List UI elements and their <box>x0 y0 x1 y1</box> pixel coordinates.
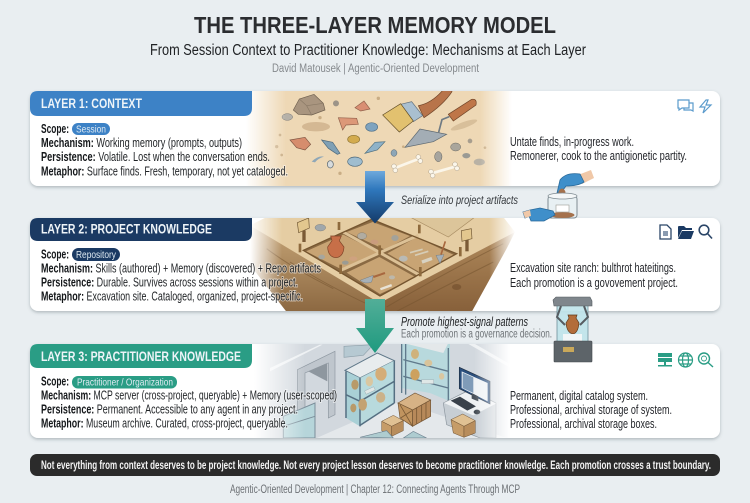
layer 2 details <box>41 248 321 304</box>
icon: document <box>660 225 671 239</box>
layer 3 details: Mechanism: MCP server (cross-project, queryable) + Memory (user-scoped) <box>41 388 337 402</box>
layer 3 details: Persistence: Permanent. Accessible to any agent in any project. <box>41 402 298 416</box>
layer 3 details: Scope: <box>41 374 69 388</box>
layer 1 details <box>41 122 288 178</box>
trowel <box>448 99 476 121</box>
layer 3 note <box>510 389 672 431</box>
author line: David Matousek | Agentic-Oriented Development <box>272 63 480 75</box>
layer 3 header: LAYER 3: PRACTITIONER KNOWLEDGE <box>41 349 241 364</box>
layer 1 details: Scope: <box>41 122 69 136</box>
layer 1 note: Untate finds, in-progress work. <box>510 135 634 149</box>
layer 1 header: LAYER 1: CONTEXT <box>41 96 143 111</box>
layer 2 note: Excavation site ranch: bulthrot hateitings. <box>510 261 676 275</box>
subtitle: From Session Context to Practitioner Knowledge: Mechanisms at Each Layer <box>150 42 586 59</box>
icon: server <box>658 353 672 366</box>
layer 3 note: Permanent, digital catalog system. <box>510 389 648 403</box>
panel: layer 3 practitioner knowledge <box>30 343 720 440</box>
icon: lightning bolt <box>700 100 711 113</box>
layer 3 note: Professional, archival storage of system. <box>510 403 672 417</box>
icon: magnifier <box>699 225 712 238</box>
callout bar <box>30 454 720 476</box>
box <box>382 415 403 426</box>
icon: folder <box>678 226 694 239</box>
layer 3 details: Metaphor: Museum archive. Curated, cross-project, queryable. <box>41 416 288 430</box>
layer 1 details: Metaphor: Surface finds. Fresh, temporary, not yet cataloged. <box>41 164 288 178</box>
arrow: project to practitioner knowledge <box>356 299 394 353</box>
icon: globe <box>678 353 692 367</box>
layer 3 header <box>30 344 252 368</box>
illustration: museum archive <box>264 344 503 438</box>
layer 2 details: Scope: <box>41 248 69 262</box>
scope pill: practitioner / organization: Practitioner / Organization <box>77 376 173 388</box>
caption: promote <box>401 315 552 340</box>
illustration: excavation site <box>240 217 515 312</box>
footer: Agentic-Oriented Development | Chapter 12: Connecting Agents Through MCP <box>230 484 520 496</box>
layer 3 note: Professional, archival storage boxes. <box>510 417 657 431</box>
box 2 <box>451 414 475 426</box>
title: THE THREE-LAYER MEMORY MODEL <box>194 12 556 38</box>
icon: chat bubbles <box>678 100 693 111</box>
shelf 1 <box>345 353 394 378</box>
layer 2 header <box>30 218 252 241</box>
desk <box>443 390 496 438</box>
illustration: gloved hands with specimen jar <box>523 170 594 221</box>
layer 3 details <box>41 374 337 430</box>
panel: layer 1 context <box>30 88 720 186</box>
icon: search <box>698 353 713 367</box>
layer 1 details: Persistence: Volatile. Lost when the conversation ends. <box>41 150 270 164</box>
caption: serialize: Serialize into project artifacts <box>401 193 518 207</box>
caption: promote: Promote highest-signal patterns <box>401 315 528 329</box>
layer 2 details: Mechanism: Skills (authored) + Memory (discovered) + Repo artifacts <box>41 262 321 276</box>
layer 2 details: Persistence: Durable. Survives across sessions within a project. <box>41 276 298 290</box>
bones <box>394 159 418 168</box>
brush <box>418 88 452 118</box>
layer 2 header: LAYER 2: PROJECT KNOWLEDGE <box>41 222 212 236</box>
scope pill: repository: Repository <box>76 249 117 261</box>
layer 1 note <box>510 135 687 163</box>
layer 2 details: Metaphor: Excavation site. Cataloged, organized, project-specific. <box>41 290 303 304</box>
layer 1 note: Remonerer, cook to the antigionetic partity. <box>510 149 687 163</box>
stones <box>435 152 442 162</box>
caption: promote: Each promotion is a governance decision. <box>401 328 552 340</box>
layer 1 details: Mechanism: Working memory (prompts, outputs) <box>41 136 242 150</box>
shelf 2 <box>402 343 450 401</box>
layer 2 note: Each promotion is a govovement project. <box>510 276 678 290</box>
arrow: context to project knowledge <box>356 171 394 224</box>
layer 2 note <box>510 261 678 290</box>
illustration: surface finds <box>250 91 508 186</box>
layer 1 header <box>30 91 252 116</box>
panel: layer 2 project knowledge <box>30 217 720 312</box>
floor cases <box>360 431 427 438</box>
scope pill: session: Session <box>76 124 106 136</box>
illustration: museum display case <box>553 297 592 362</box>
crate <box>398 393 431 410</box>
